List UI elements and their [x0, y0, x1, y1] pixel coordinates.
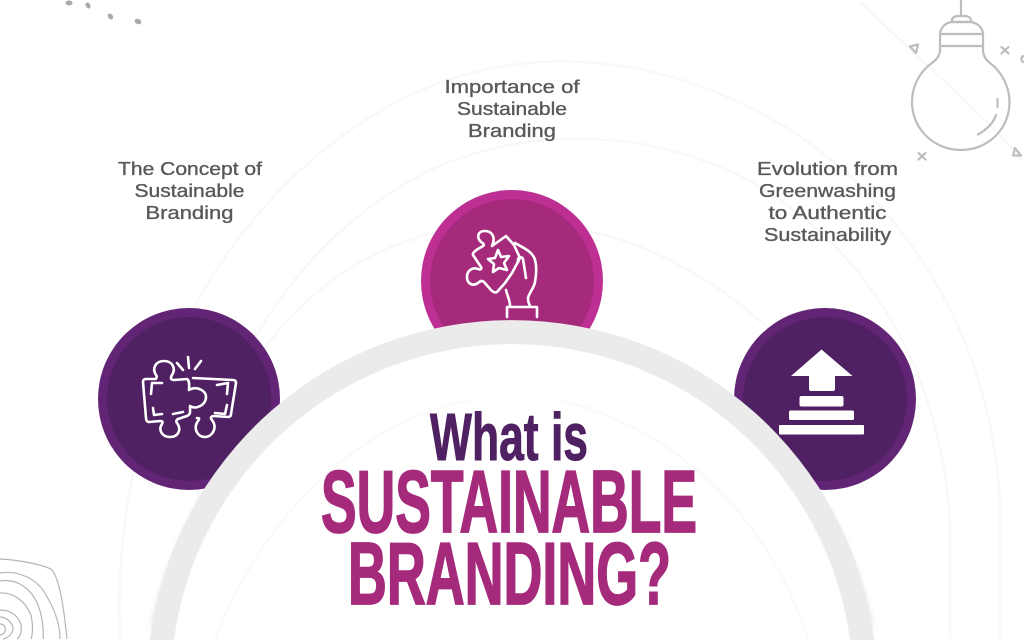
panel: left circle with puzzle icon [98, 308, 280, 490]
text: Evolution from Greenwashing to Authentic Sustainability: to Authentic [768, 202, 886, 223]
text: Evolution from Greenwashing to Authentic Sustainability: Greenwashing [759, 180, 896, 201]
icon: light bulb decoration [910, 1, 1023, 160]
panel: middle circle with hand and puzzle icon [421, 190, 603, 372]
text: Importance of Sustainable Branding: Sustainable [457, 98, 567, 119]
text: Evolution from Greenwashing to Authentic Sustainability: Sustainability [764, 224, 892, 245]
title: SUSTAINABLE [321, 452, 697, 551]
icon: up arrow on steps [779, 350, 864, 434]
text: The Concept of Sustainable Branding: Branding [146, 202, 234, 223]
decoration: dots top left [66, 0, 142, 25]
decoration: contour rings bottom left [0, 559, 67, 639]
text: Importance of Sustainable Branding: Branding [468, 120, 556, 141]
text: Evolution from Greenwashing to Authentic Sustainability: Evolution from [757, 158, 898, 179]
panel: right circle with arrow icon [734, 308, 916, 490]
text: The Concept of Sustainable Branding: Sustainable [134, 180, 244, 201]
title: BRANDING? [348, 524, 671, 623]
icon: puzzle pieces [143, 357, 236, 437]
text: Evolution from Greenwashing to Authentic Sustainability [757, 158, 898, 245]
text: The Concept of Sustainable Branding: The Concept of [118, 158, 263, 179]
icon: hand holding puzzle piece [467, 231, 537, 317]
panel: central semicircle [150, 320, 874, 640]
text: Importance of Sustainable Branding: Importance of [444, 76, 581, 97]
text: The Concept of Sustainable Branding [118, 158, 263, 223]
text: Importance of Sustainable Branding [444, 76, 581, 141]
title: What is [430, 400, 588, 475]
title [321, 400, 697, 623]
